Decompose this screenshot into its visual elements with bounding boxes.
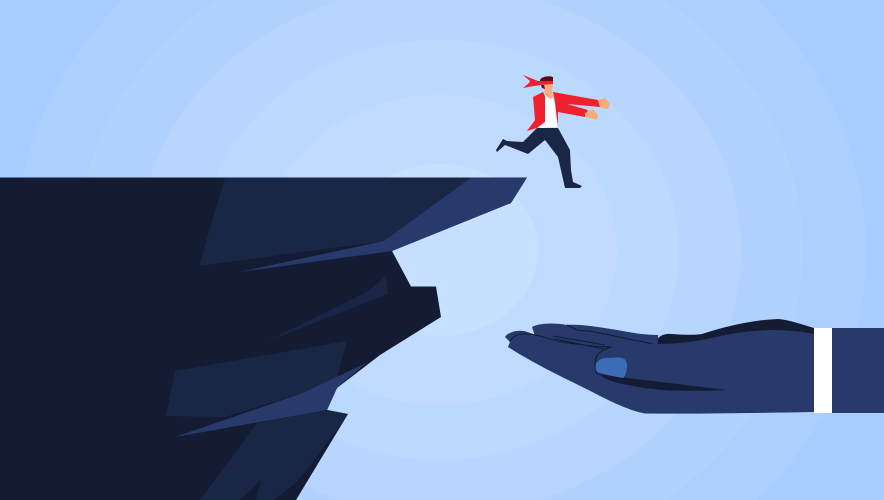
blindfold [523, 75, 553, 88]
white cuff [814, 328, 832, 413]
back fingers [532, 324, 658, 348]
legs and shoes [496, 128, 582, 188]
hands [585, 98, 610, 120]
shadow behind hand [655, 319, 814, 350]
lower lit edge [175, 363, 366, 437]
white shirt [537, 94, 558, 128]
hand [505, 319, 884, 414]
cliff main rock [0, 178, 527, 500]
sleeve [832, 328, 884, 413]
bottom rock facet [200, 410, 348, 500]
man running blindfolded [496, 75, 610, 188]
hair [540, 76, 553, 89]
cliff [0, 178, 527, 500]
palm crease [598, 374, 727, 391]
head [543, 84, 553, 99]
jacket [527, 92, 600, 131]
lower rock facet [166, 341, 347, 417]
cliff lit edge [239, 178, 527, 272]
palm and fingers [505, 330, 814, 414]
thumb nail [596, 358, 627, 378]
finger lines [510, 325, 653, 349]
cliff top facet [199, 178, 471, 266]
thumb outline [595, 347, 612, 375]
small crack facet [247, 276, 388, 351]
